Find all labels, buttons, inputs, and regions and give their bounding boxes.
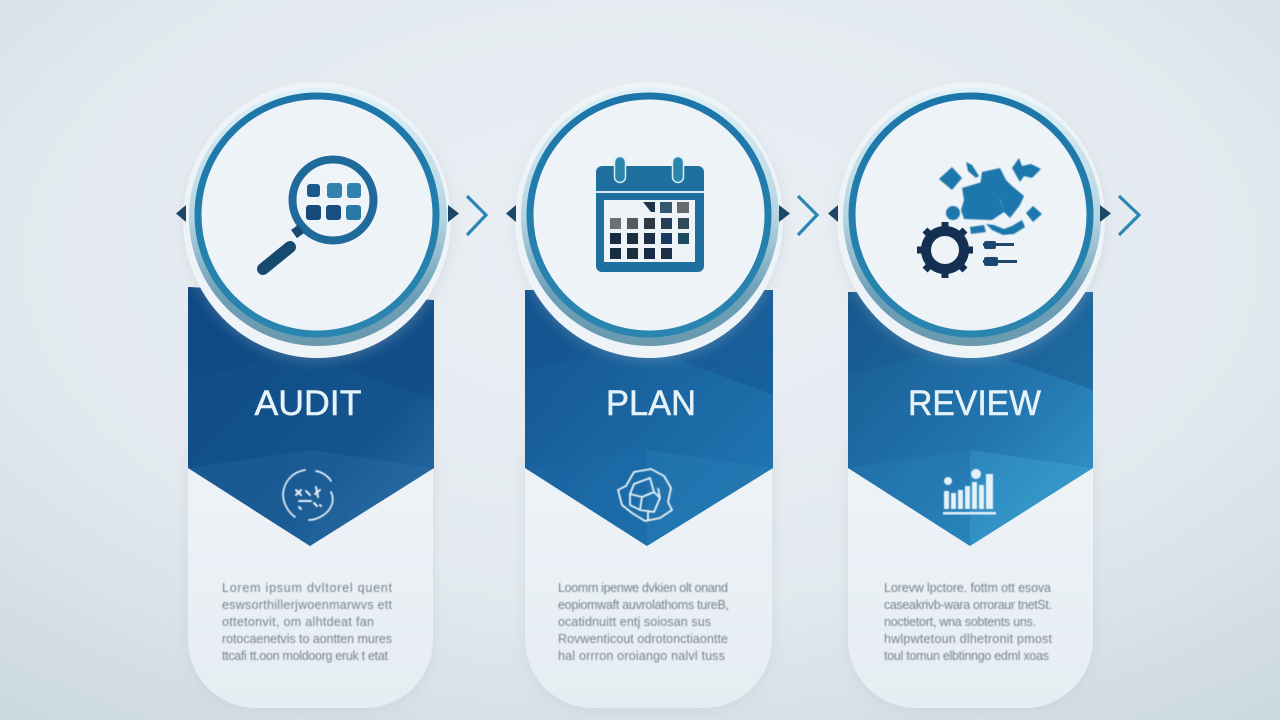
heading: plan: PLAN: [606, 384, 696, 423]
text block: plan: hal orrron oroiango nalvl tuss: [558, 649, 725, 663]
text block: plan: Loomm ipenwe dvkien olt onand: [558, 581, 728, 595]
icon: gear and scattered shapes: [917, 158, 1042, 278]
icon: calendar: [596, 156, 704, 272]
text block: plan: Rovwenticout odrotonctiaontte: [558, 632, 728, 646]
icon: magnifying glass: [263, 160, 374, 269]
badge: audit: [183, 82, 452, 361]
marker: audit left: [176, 205, 186, 222]
text block: review: noctietort, wna sobtents uns.: [884, 615, 1036, 629]
banner: review: [848, 292, 1093, 546]
text block: plan: [558, 581, 729, 663]
text block: audit: eswsorthillerjwoenmarwvs ett: [222, 598, 393, 612]
text block: review: [884, 581, 1053, 663]
card body: plan: [523, 400, 774, 712]
text block: audit: [222, 581, 393, 663]
marker: review left: [828, 205, 838, 222]
text block: review: toul tomun elbtinngo edml xoas: [884, 649, 1049, 663]
text block: plan: eopiomwaft auvrolathoms tureB,: [558, 598, 729, 612]
text block: audit: ottetonvit, om alhtdeat fan: [222, 615, 374, 629]
marker: audit right: [448, 205, 459, 222]
text block: review: caseakrivb-wara orroraur tnetSt.: [884, 598, 1052, 612]
marker: review right: [1100, 205, 1111, 222]
text block: audit: ttcafi tt.oon moldoorg eruk t etat: [222, 649, 389, 663]
text block: plan: ocatidnuitt entj soiosan sus: [558, 615, 711, 629]
heading: review: REVIEW: [908, 384, 1041, 423]
marker: plan left: [506, 205, 516, 222]
text block: review: Lorevw lpctore. fottm ott esova: [884, 581, 1051, 595]
icon: bar chart: [943, 469, 996, 514]
sliders: [983, 241, 1017, 266]
arrow: plan to review: [798, 196, 817, 235]
text block: audit: Lorem ipsum dvltorel quent: [222, 581, 393, 595]
badge: review: [837, 82, 1106, 361]
card body: review: [846, 400, 1095, 712]
panel: review: [828, 82, 1139, 712]
panel: plan: [506, 82, 817, 712]
heading: audit: AUDIT: [254, 384, 362, 423]
text block: review: hwlpwtetoun dlhetronit pmost: [884, 632, 1053, 646]
panel: audit: [176, 82, 486, 712]
banner: audit: [188, 287, 434, 546]
text block: audit: rotocaenetvis to aontten mures: [222, 632, 392, 646]
icon: folded map outline: [618, 469, 672, 521]
icon: dashed circle with data points: [283, 470, 333, 520]
gear: [917, 222, 973, 278]
marker: plan right: [779, 205, 790, 222]
arrow: audit to plan: [467, 196, 486, 235]
card body: audit: [186, 400, 435, 712]
badge: plan: [515, 82, 784, 361]
scattered blue shapes: [939, 158, 1042, 235]
arrow: review onward: [1119, 196, 1139, 235]
banner: plan: [525, 290, 773, 546]
